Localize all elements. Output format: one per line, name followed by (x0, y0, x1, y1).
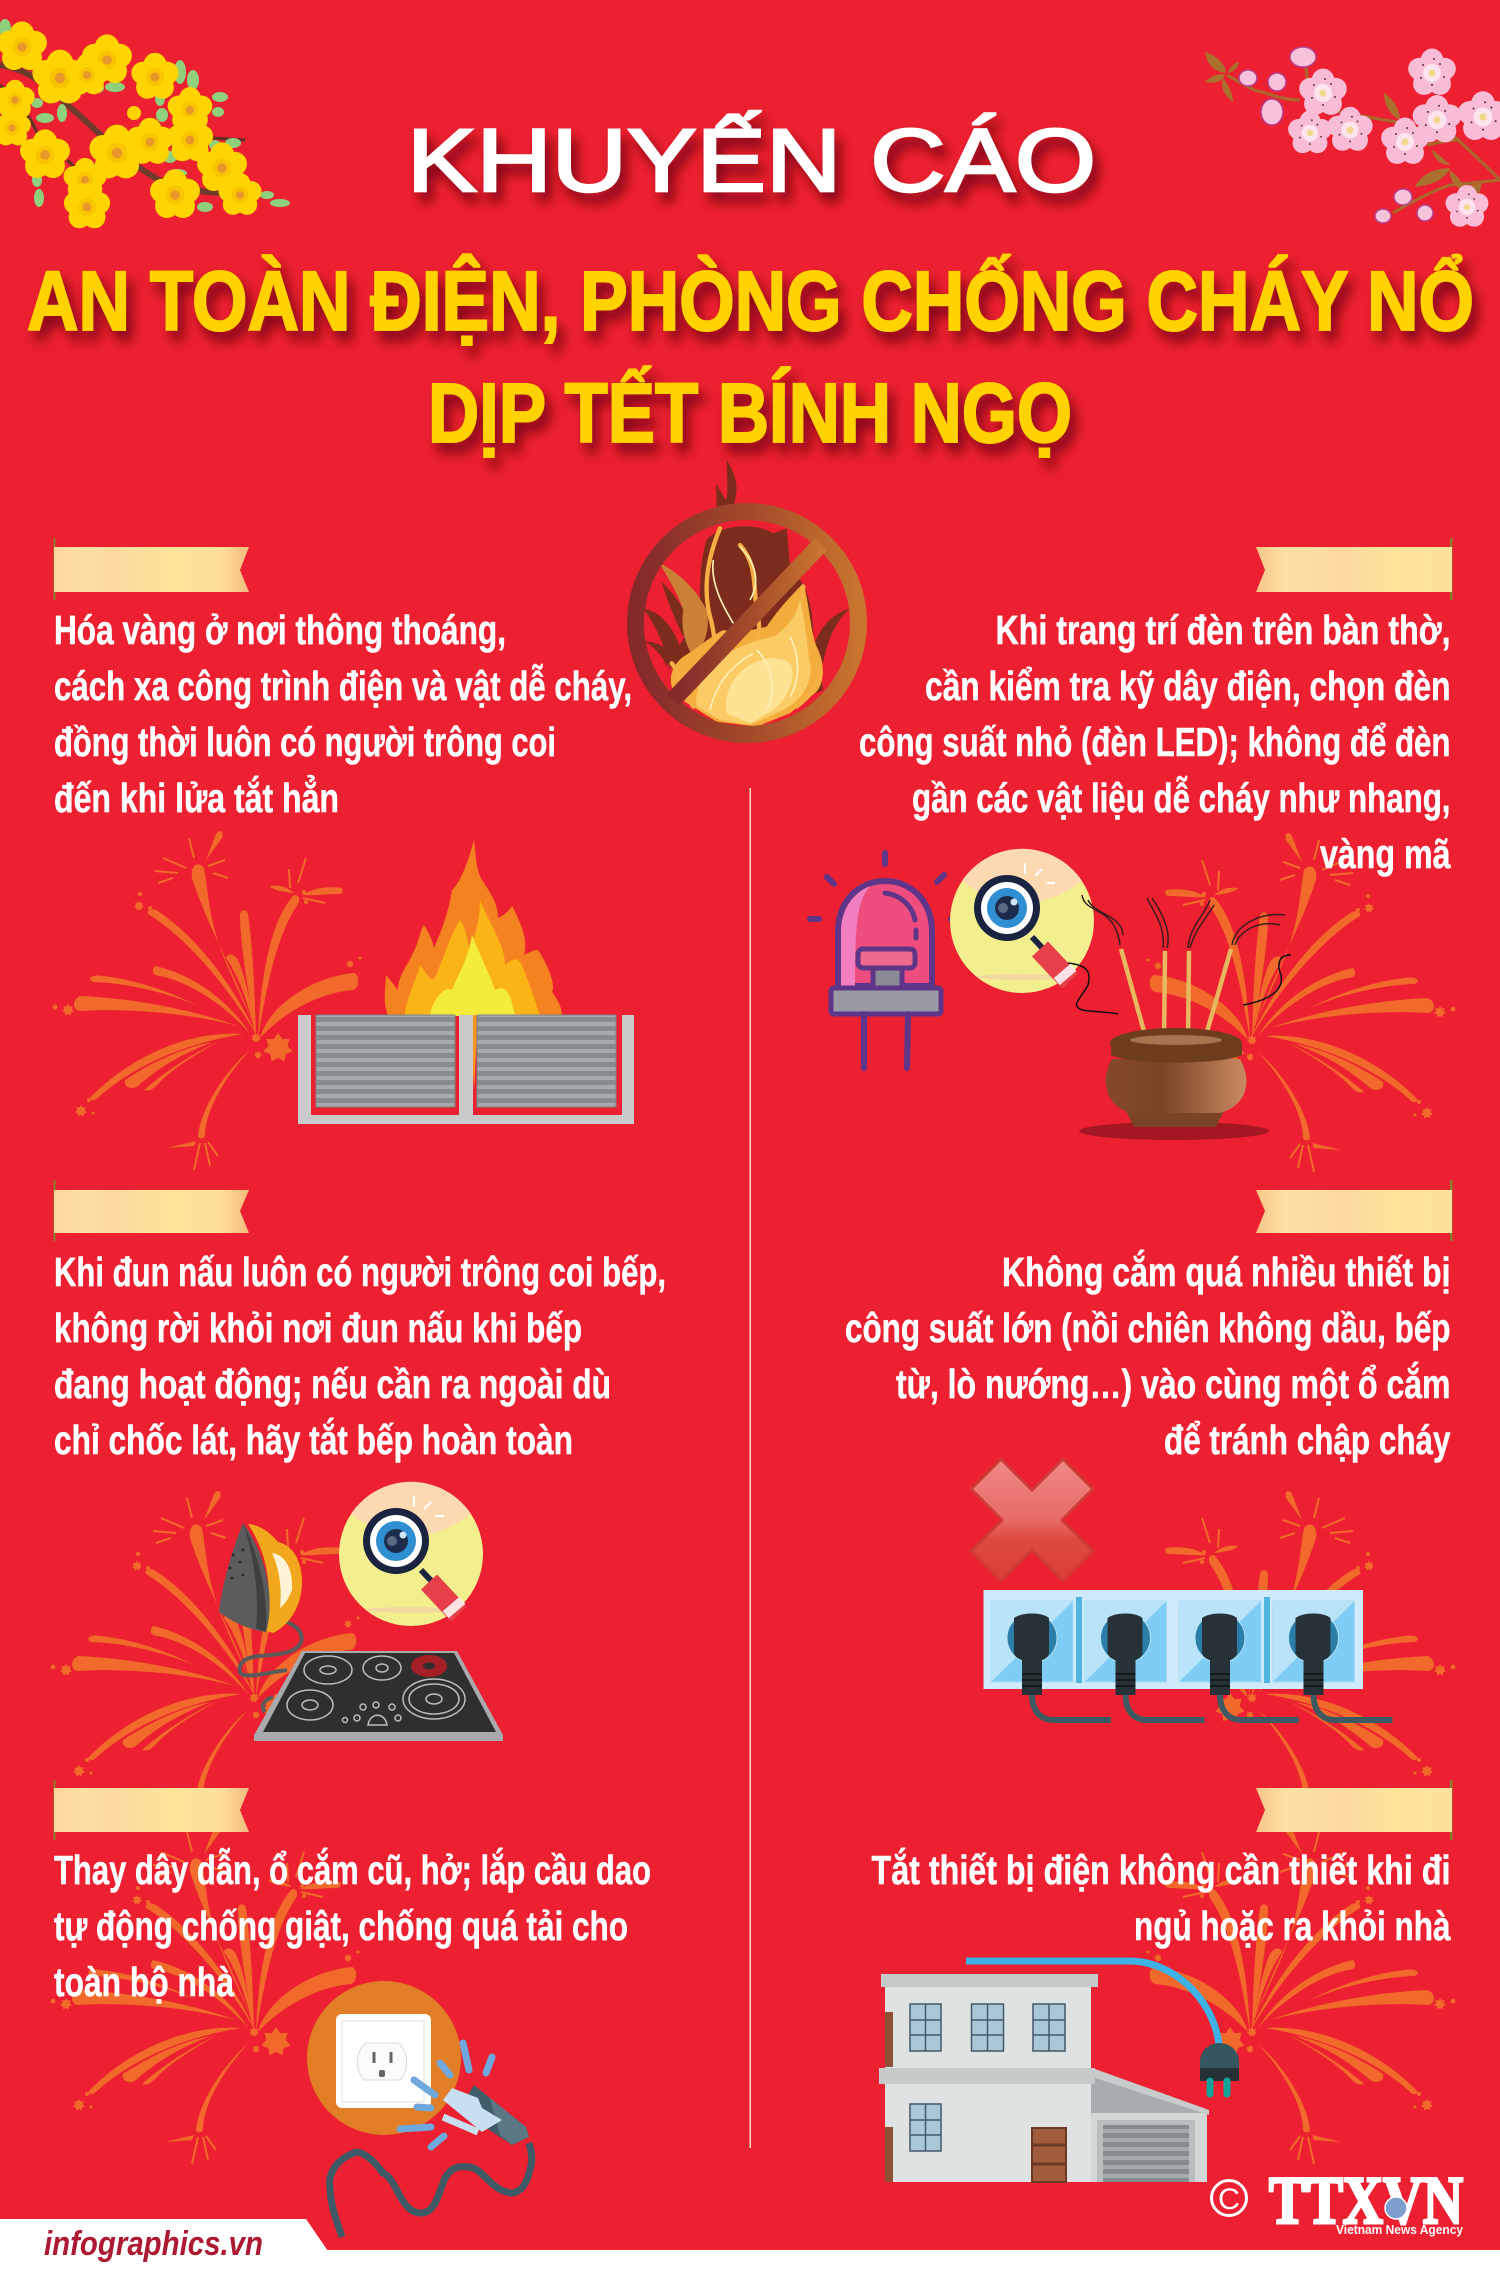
ribbon (54, 1180, 249, 1241)
text block: vàng mã (1320, 831, 1451, 877)
text block (54, 1249, 666, 1463)
text block: đồng thời luôn có người trông coi (54, 719, 556, 765)
text block: Thay dây dẫn, ổ cắm cũ, hở; lắp cầu dao (54, 1847, 651, 1893)
text block: Khi đun nấu luôn có người trông coi bếp, (54, 1249, 666, 1295)
icon: house (879, 1974, 1209, 2182)
icon: LED bulb (810, 853, 963, 1068)
ribbon (1256, 538, 1452, 600)
text block: cách xa công trình điện và vật dễ cháy, (54, 663, 632, 709)
footer tab: infographics.vn: infographics.vn (44, 2225, 263, 2263)
icon: incense pot (1068, 895, 1291, 1140)
icon: outlet (307, 1981, 461, 2135)
panel: too many plugs (845, 1180, 1456, 1830)
ribbon (1256, 1780, 1452, 1840)
fireworks (1146, 833, 1456, 1172)
copyright mark (1212, 2180, 1246, 2216)
icon: cooktop (254, 1651, 503, 1741)
icon: damaged plug and cord (330, 2043, 532, 2237)
panel: burn votive paper (52, 538, 634, 1170)
text block (54, 607, 632, 821)
icon: red cross (971, 1459, 1093, 1581)
footer band (0, 2250, 1500, 2269)
center divider (750, 788, 751, 2148)
text block: toàn bộ nhà (54, 1959, 234, 2005)
icon: yellow apricot blossom branch (0, 19, 290, 233)
fireworks (50, 1825, 360, 2164)
icon: fire behind shutters (298, 840, 634, 1124)
copyright mark: C (1218, 2183, 1240, 2216)
text block: đến khi lửa tắt hẳn (54, 774, 339, 821)
text block: đang hoạt động; nếu cần ra ngoài dù (54, 1361, 611, 1407)
panel: replace wires (50, 1780, 651, 2237)
fireworks (52, 831, 362, 1170)
icon: magnifier (339, 1482, 483, 1626)
text block: chỉ chốc lát, hãy tắt bếp hoàn toàn (54, 1417, 573, 1463)
text block (872, 1847, 1451, 1949)
ribbon (54, 538, 249, 600)
icon: pink peach blossom branch (1205, 47, 1500, 231)
icon: blue cable and plug (966, 1961, 1239, 2094)
text block (845, 1249, 1451, 1463)
logo: TTXVN: Vietnam News Agency (1336, 2222, 1464, 2237)
logo: TTXVN: TTXVN (1269, 2162, 1463, 2238)
panel: cooking (50, 1180, 666, 1830)
fireworks (1146, 1825, 1456, 2164)
text block: Hóa vàng ở nơi thông thoáng, (54, 607, 506, 653)
icon: iron (219, 1523, 302, 1712)
text block (54, 1847, 651, 2005)
footer tab: infographics.vn (0, 2219, 328, 2269)
ribbon (1256, 1180, 1452, 1241)
text block: không rời khỏi nơi đun nấu khi bếp (54, 1305, 582, 1351)
text block: tự động chống giật, chống quá tải cho (54, 1903, 628, 1949)
heading: dịp tết: DỊP TẾT BÍNH NGỌ (428, 366, 1072, 460)
icon: magnifier (950, 849, 1094, 993)
panel: switch off (872, 1780, 1456, 2182)
icon: prohibited fire (636, 460, 858, 734)
panel: altar lights (810, 538, 1456, 1172)
title: KHUYẾN CÁO (407, 110, 1096, 210)
fireworks (1146, 1491, 1456, 1830)
text block (859, 607, 1451, 877)
icon: power strip with plugs (984, 1590, 1392, 1720)
ribbon (54, 1780, 249, 1840)
fireworks (50, 1491, 360, 1830)
